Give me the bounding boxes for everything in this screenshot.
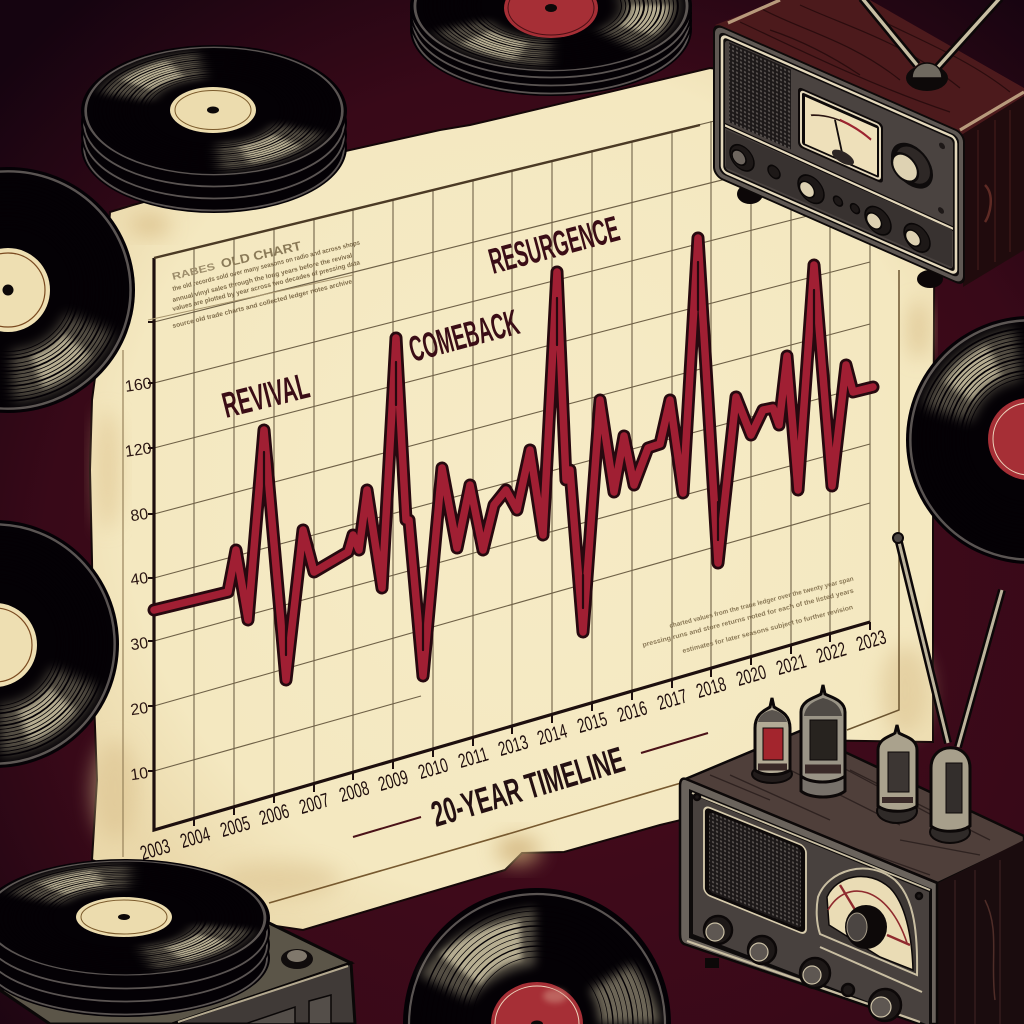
tube 4 — [930, 748, 970, 843]
old chart caption block: values are plotted by year across two decades of pressing data — [172, 259, 361, 313]
vinyl: left lower — [0, 520, 119, 768]
vinyl stack: top left — [81, 45, 347, 213]
x axis year labels: 2008 — [337, 778, 372, 807]
x axis year labels: 2021 — [774, 651, 809, 680]
x axis year labels: 2007 — [297, 790, 332, 819]
antennas — [893, 533, 1002, 747]
radio antennas — [862, 0, 1000, 91]
large dial knob — [891, 135, 933, 196]
y axis labels: 30 — [129, 635, 149, 654]
y axis labels: 160 — [124, 375, 153, 396]
footnote block: estimates for later seasons subject to further revision — [682, 604, 854, 655]
old chart caption block: RABES — [171, 261, 217, 283]
radio wood side — [963, 96, 1024, 287]
turntable base — [0, 923, 355, 1024]
radio with vacuum tubes: bottom right — [680, 533, 1024, 1024]
x axis year labels: 2020 — [734, 662, 769, 691]
old chart caption block: OLD CHART — [220, 239, 303, 271]
vinyl: left upper — [0, 167, 135, 413]
line series: peaks and dips — [154, 238, 873, 680]
x axis year labels: 2023 — [854, 627, 889, 656]
panel: aged paper chart sheet — [90, 68, 935, 930]
annotation: Revival: REVIVAL — [218, 365, 313, 426]
tuning dial — [817, 869, 922, 992]
x axis year labels — [138, 627, 889, 865]
x axis year labels: 2009 — [376, 767, 411, 796]
x axis year labels: 2017 — [655, 686, 690, 715]
y axis labels: 20 — [129, 700, 149, 719]
radio wood top — [683, 731, 1024, 883]
vinyl stack: bottom left — [0, 857, 270, 1017]
x axis year labels: 2006 — [257, 801, 292, 830]
x axis year labels: 2011 — [456, 744, 491, 773]
chart gridlines — [154, 83, 870, 818]
annotation: Comeback: COMEBACK — [404, 301, 523, 370]
x axis year labels: 2010 — [416, 755, 451, 784]
footnote block: pressing runs and store returns noted for each of the listed years — [642, 587, 855, 649]
old chart caption block: annual vinyl sales through the long years before the revival — [172, 252, 353, 304]
y axis labels: 40 — [129, 570, 149, 589]
small knobs — [694, 794, 922, 1021]
tube 1 with red core — [752, 698, 792, 783]
heading: 20-year timeline: 20-YEAR TIMELINE — [427, 739, 629, 835]
x axis year labels: 2016 — [615, 698, 650, 727]
y axis labels: 80 — [129, 506, 149, 525]
radio wood top — [715, 0, 1024, 134]
footnote block — [642, 576, 855, 655]
radio front face — [680, 779, 937, 1024]
x axis year labels: 2015 — [575, 709, 610, 738]
small knobs — [730, 141, 930, 257]
old chart caption block: the old records sold over many seasons on radio and across shops — [172, 239, 361, 293]
x axis year labels: 2005 — [218, 813, 253, 842]
x axis year labels: 2003 — [138, 836, 173, 865]
vinyl stack: top center — [410, 0, 722, 96]
x axis year labels: 2014 — [535, 721, 570, 750]
heading: 20-year timeline — [353, 733, 708, 837]
x axis year labels: 2004 — [178, 824, 213, 853]
radio feet — [737, 184, 943, 288]
annotation: Resurgence: RESURGENCE — [484, 208, 624, 282]
y axis labels — [124, 375, 153, 784]
old chart caption block: source old trade charts and collected ledger notes archive — [172, 278, 353, 330]
x axis year labels: 2013 — [496, 732, 531, 761]
vinyl: right — [906, 316, 1024, 564]
radio front face — [713, 22, 965, 287]
footnote block: charted values from the trade ledger over the twenty year span — [669, 576, 854, 630]
radio: top right — [713, 0, 1024, 288]
y axis labels: 10 — [129, 765, 149, 784]
tube 2 — [801, 685, 845, 797]
x axis year labels: 2022 — [814, 639, 849, 668]
old chart caption block — [148, 239, 361, 330]
radio wood side — [938, 840, 1024, 1024]
chart axes — [148, 125, 870, 830]
foot — [705, 958, 719, 968]
y axis labels: 120 — [124, 440, 153, 461]
vu meter — [798, 87, 883, 184]
x axis year labels: 2018 — [694, 674, 729, 703]
vinyl: bottom center — [403, 888, 671, 1024]
tube 3 — [877, 725, 917, 823]
